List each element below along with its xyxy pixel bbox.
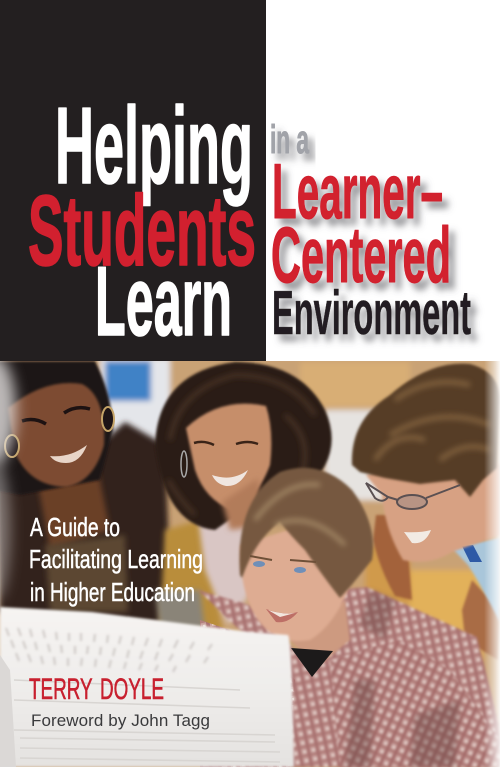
tagline [29, 512, 203, 607]
middle woman's face [186, 404, 271, 510]
front man's neck and undershirt [290, 600, 350, 665]
middle woman's mouth [212, 470, 248, 486]
monitor panel grooves [14, 680, 280, 762]
main title: Helping Students Learn: Helping [55, 85, 253, 207]
front man's mouth [266, 609, 298, 622]
front man's eyes [253, 561, 306, 573]
left woman's mouth [50, 445, 87, 463]
middle woman's hair [155, 362, 332, 530]
middle woman's curls [168, 375, 315, 515]
subtitle: in a Learner-Centered Environment [270, 118, 471, 348]
middle woman's earring [181, 451, 187, 477]
tagline line 3: in Higher Education [30, 577, 195, 607]
left woman's face [8, 383, 104, 487]
front man's shirt [198, 587, 500, 767]
photo: students at a computer [0, 355, 500, 767]
front man's shirt folds [345, 590, 460, 767]
photo edge fades [0, 355, 500, 767]
black title panel [0, 0, 266, 361]
photo background room [0, 355, 500, 767]
middle woman's eyes [194, 442, 258, 445]
left woman's hair [0, 361, 113, 495]
title word: Learn: Learn [95, 246, 232, 356]
man's hair highlights [375, 382, 490, 460]
man's glasses [366, 483, 460, 509]
man's striped collar [452, 538, 500, 622]
middle woman's top [195, 520, 248, 626]
man's hair [352, 364, 500, 497]
main title: Helping Students Learn [28, 85, 256, 356]
man's arm [373, 515, 412, 600]
man's face [365, 474, 492, 562]
tagline line 1: A Guide to [30, 512, 120, 542]
man's smile [404, 530, 431, 543]
subtitle words: in a: in a [270, 118, 309, 162]
young man in front [198, 468, 500, 767]
front man's face [240, 520, 350, 641]
man with glasses on right [352, 364, 500, 660]
front man's hair highlights [255, 484, 345, 545]
title word: Students: Students [28, 175, 256, 287]
foreword credit: Foreword by John Tagg [31, 711, 210, 730]
left woman's body [0, 422, 172, 625]
front man's hair [240, 468, 373, 598]
left woman's eyes [22, 408, 90, 424]
computer monitor [0, 607, 294, 767]
woman in middle [155, 362, 332, 640]
middle woman's neck [222, 478, 264, 530]
woman on left [0, 361, 172, 625]
author name: TERRY DOYLE [29, 673, 164, 706]
left woman's earrings [5, 407, 114, 457]
monitor vent slots [6, 628, 212, 672]
middle woman's jacket [160, 520, 225, 640]
tagline line 2: Facilitating Learning [29, 544, 203, 574]
